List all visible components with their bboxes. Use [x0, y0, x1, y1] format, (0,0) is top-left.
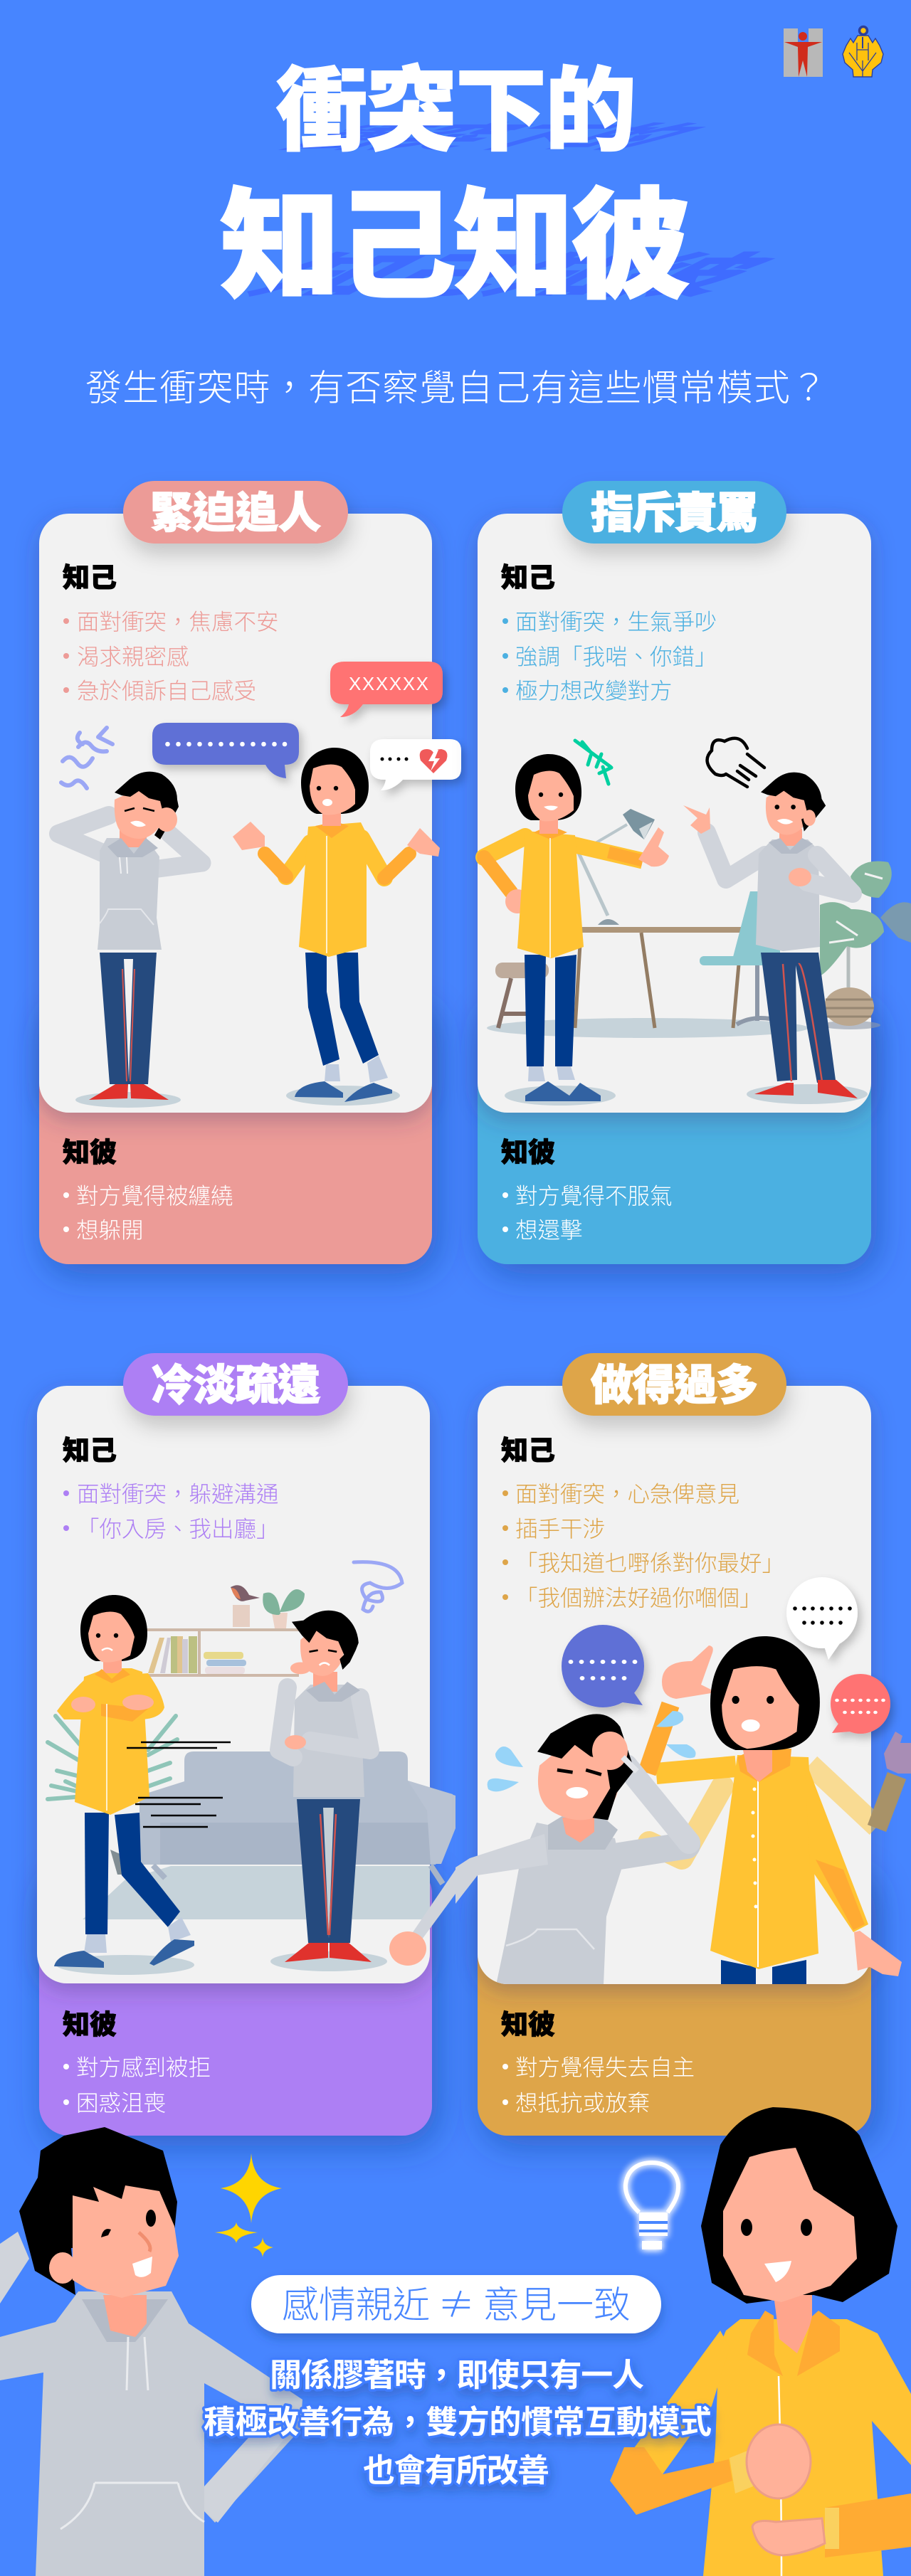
panel: 做得過多	[389, 1351, 911, 2136]
text block: 知彼	[501, 1130, 673, 1245]
panel band	[478, 996, 871, 1264]
title line 1: 衝突下的	[276, 37, 636, 169]
text block: 知彼: 知彼	[63, 1130, 117, 1170]
illustration: woman with many arms	[647, 1636, 911, 1984]
text block: 知己: 面對衝突，生氣爭吵	[515, 604, 717, 637]
illustration: man torso	[496, 1823, 621, 1985]
illustration: office background	[487, 809, 911, 1038]
speech bubble: red	[330, 662, 443, 717]
logo: red figure	[784, 28, 823, 77]
text block: 知彼	[63, 1130, 233, 1245]
title line 2: 知己知彼	[221, 149, 690, 322]
title	[216, 37, 821, 322]
text block: 知己: 知己	[501, 556, 555, 595]
text block: 知彼: 想躲開	[76, 1212, 144, 1245]
panel card	[37, 1386, 430, 1983]
panel card	[478, 1386, 871, 1984]
text block: closing message: 積極改善行為，雙方的慣常互動模式	[204, 2396, 712, 2442]
text block: 知彼: 知彼	[63, 2003, 117, 2042]
text block: closing message: 關係膠著時，即使只有一人	[270, 2349, 644, 2395]
text block: 知己: 急於傾訴自己感受	[77, 673, 256, 706]
title shadow: 知己知彼	[216, 238, 821, 307]
speech bubble: red round	[831, 1674, 890, 1734]
text block: 知彼: 知彼	[501, 1130, 555, 1170]
text block: 知彼: 對方覺得被纏繞	[76, 1178, 233, 1211]
speech bubble: purple round	[562, 1625, 644, 1707]
text block: 知己	[63, 556, 279, 706]
logos	[784, 27, 883, 77]
panel card	[39, 514, 432, 1113]
panel band	[39, 996, 432, 1264]
panel: 指斥責罵	[478, 479, 911, 1264]
speech bubble: red: XXXXXX	[349, 673, 428, 694]
illustration: man looking away	[270, 1611, 387, 1971]
pill heading: 緊迫追人	[150, 479, 321, 541]
text block: 知己: 極力想改變對方	[515, 673, 673, 706]
text block: 知彼: 對方感到被拒	[76, 2050, 211, 2082]
icon: sweat drops	[488, 1711, 696, 1791]
illustration: bottom man	[0, 2127, 302, 2576]
text block: 知己: 插手干涉	[515, 1511, 605, 1544]
icon: huff cloud	[707, 738, 764, 787]
text block: 知己: 渴求親密感	[77, 639, 189, 672]
pill heading: 指斥責罵	[591, 479, 759, 541]
text block: 知彼: 知彼	[501, 2003, 555, 2042]
text block: 知己: 「你入房、我出廳」	[77, 1511, 279, 1544]
pill heading: 做得過多	[591, 1351, 759, 1413]
panel: 緊迫追人	[39, 479, 461, 1264]
illustration: woman arguing	[484, 754, 669, 1106]
text block: 知彼: 想還擊	[515, 1212, 583, 1245]
panel card	[478, 514, 871, 1113]
text block: 知己: 面對衝突，躲避溝通	[77, 1476, 279, 1509]
callout: key message pill: 感情親近 ≠ 意見一致	[282, 2275, 631, 2328]
illustration: bottom woman	[610, 2107, 911, 2576]
text block: 知彼	[63, 2003, 211, 2118]
text block: 知彼: 對方覺得不服氣	[515, 1178, 673, 1211]
text block: 知己: 「我個辦法好過你嗰個」	[515, 1580, 762, 1613]
illustration: man arms and head	[389, 1714, 689, 1966]
text block: 知己	[501, 556, 717, 706]
text block: 知己: 知己	[63, 556, 117, 595]
text block: 知彼: 想抵抗或放棄	[515, 2085, 650, 2118]
text block: closing message: 也會有所改善	[363, 2444, 549, 2491]
title shadow	[216, 114, 821, 307]
logo: hands emblem	[843, 27, 883, 77]
illustration: man covering ears	[58, 728, 202, 1108]
icon: scribble	[354, 1562, 402, 1611]
illustration: woman arms crossed	[54, 1595, 194, 1975]
panel band	[39, 1864, 432, 2136]
speech bubble: white round	[786, 1577, 858, 1660]
subtitle: 發生衝突時，有否察覺自己有這些慣常模式？	[85, 359, 827, 411]
text block: closing message	[204, 2349, 712, 2491]
title shadow: 衝突下的	[246, 114, 758, 156]
icon: sparkles	[215, 2153, 282, 2257]
text block: 知己	[63, 1429, 279, 1544]
speed lines	[127, 1742, 231, 1827]
text block: 知彼: 對方覺得失去自主	[515, 2050, 695, 2082]
text block: 知彼: 困惑沮喪	[76, 2085, 166, 2118]
text block: 知己: 強調「我啱、你錯」	[515, 639, 717, 672]
text block: 知己: 知己	[63, 1429, 117, 1468]
icon: light bulb	[626, 2163, 678, 2249]
speech bubble: purple	[152, 723, 299, 778]
icon: anger mark	[575, 741, 611, 784]
pill heading: 冷淡疏遠	[151, 1351, 320, 1413]
illustration: man pointing	[683, 773, 868, 1104]
text block: 知己: 知己	[501, 1429, 555, 1468]
text block: 知己: 面對衝突，焦慮不安	[77, 604, 279, 637]
illustration: woman shrugging	[233, 748, 440, 1106]
text block: 知彼	[501, 2003, 695, 2118]
text block: 知己: 「我知道乜嘢係對你最好」	[515, 1545, 784, 1578]
text block: 知己	[501, 1429, 784, 1613]
text block: 知己: 面對衝突，心急俾意見	[515, 1476, 739, 1509]
panel: 冷淡疏遠	[37, 1351, 456, 2136]
illustration: living room background	[48, 1585, 456, 1919]
panel band	[478, 1864, 871, 2136]
speech bubble: broken heart	[370, 739, 461, 790]
